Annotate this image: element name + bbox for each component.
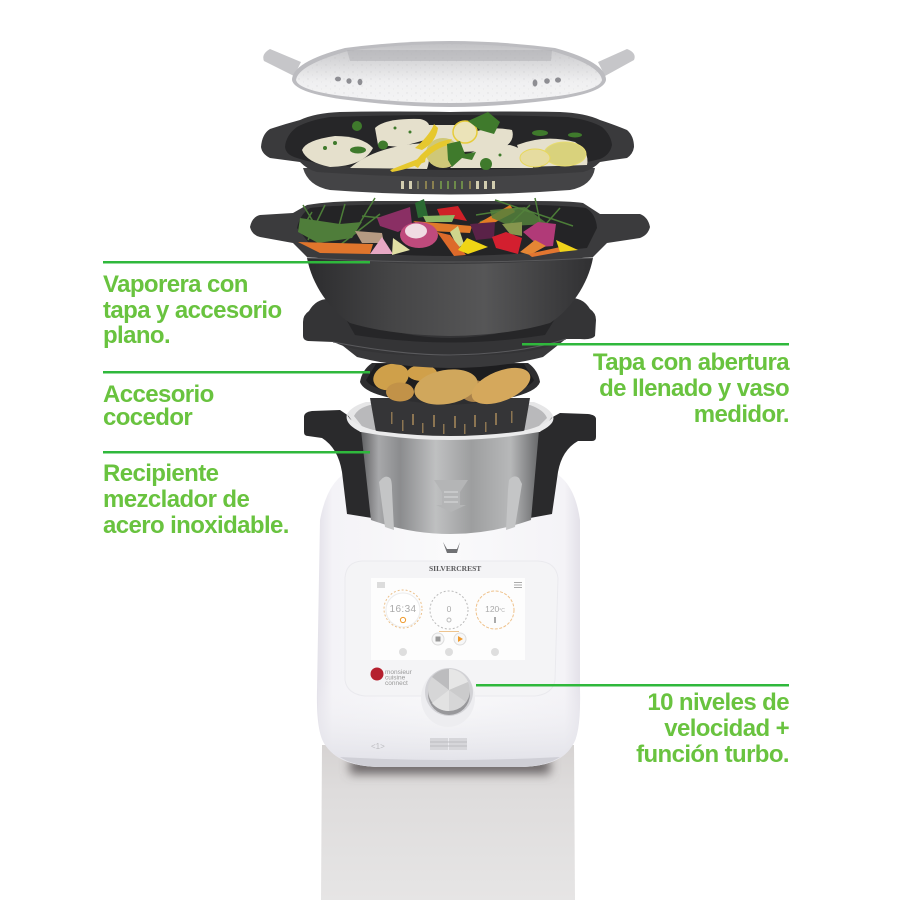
callout: lid: Tapa con abertura bbox=[593, 349, 790, 376]
callout: lid bbox=[522, 343, 790, 428]
temperature dial: 120°C bbox=[485, 604, 505, 614]
mixing bowl rear and handles bbox=[304, 402, 596, 518]
callout: steamer: plano. bbox=[103, 322, 170, 349]
tray slots bbox=[401, 181, 495, 189]
lid body bbox=[292, 41, 606, 107]
monsieur cuisine logo: cuisine bbox=[385, 674, 406, 682]
bowl logo bbox=[443, 542, 460, 553]
lid vent holes bbox=[335, 77, 561, 87]
lid handles bbox=[263, 49, 635, 76]
basket body bbox=[370, 398, 530, 438]
monsieur cuisine logo: monsieur bbox=[385, 669, 413, 676]
speed dial: 0 bbox=[447, 604, 452, 614]
callout: speed levels bbox=[476, 684, 790, 768]
lid flange and handles bbox=[303, 298, 596, 356]
herbs bbox=[323, 112, 582, 170]
callout: cooking accessory: Accesorio bbox=[103, 381, 214, 408]
brand name: SILVERCREST bbox=[429, 564, 481, 573]
lid lower disc bbox=[333, 338, 567, 368]
touch screen bbox=[371, 578, 525, 660]
callout: lid: de llenado y vaso bbox=[599, 375, 789, 402]
monsieur cuisine logo bbox=[370, 668, 413, 687]
callout: speed levels: velocidad + bbox=[664, 715, 790, 742]
callout: cooking accessory bbox=[103, 371, 370, 431]
monsieur cuisine logo: connect bbox=[385, 680, 408, 687]
callout: mixing bowl bbox=[103, 451, 370, 539]
control panel bbox=[345, 561, 558, 696]
callout: mixing bowl: acero inoxidable. bbox=[103, 512, 289, 539]
callout: speed levels: 10 niveles de bbox=[647, 689, 789, 716]
screen bottom icons bbox=[399, 648, 499, 656]
callout: steamer: tapa y accesorio bbox=[103, 297, 282, 324]
callout: steamer: Vaporera con bbox=[103, 271, 248, 298]
base vent bbox=[430, 738, 467, 750]
steel arrow icon bbox=[434, 480, 468, 512]
timer dial bbox=[384, 590, 422, 628]
steel body bbox=[361, 430, 539, 534]
sound mark: <1> bbox=[371, 742, 385, 751]
cooking basket with potatoes bbox=[360, 360, 540, 438]
callout: steamer bbox=[103, 261, 370, 349]
callout: speed levels: función turbo. bbox=[636, 741, 789, 768]
right black handle bbox=[530, 413, 596, 518]
steamer bowl with vegetables bbox=[250, 198, 650, 336]
callout: mixing bowl: mezclador de bbox=[103, 486, 249, 513]
callout: lid: medidor. bbox=[694, 401, 789, 428]
bowl body bbox=[307, 258, 593, 336]
steel rim back bbox=[347, 402, 553, 432]
left black handle bbox=[304, 410, 372, 518]
lemon slices bbox=[390, 121, 586, 172]
speed knob bbox=[421, 668, 475, 727]
vegetables bbox=[298, 198, 578, 257]
temperature dial bbox=[476, 591, 514, 629]
steel mixing bowl front bbox=[347, 414, 553, 534]
potatoes bbox=[370, 360, 535, 412]
bowl rim bbox=[250, 201, 650, 264]
glass lid bbox=[263, 41, 635, 107]
reflection below appliance bbox=[321, 745, 575, 900]
timer dial: 16:34 bbox=[389, 604, 417, 615]
steel embossed marks bbox=[379, 476, 522, 530]
fish fillets bbox=[302, 119, 588, 169]
basket rim bbox=[360, 363, 540, 405]
tray base bbox=[303, 168, 595, 194]
play and stop buttons bbox=[432, 631, 466, 645]
callout: mixing bowl: Recipiente bbox=[103, 460, 219, 487]
appliance base bbox=[317, 470, 580, 767]
steel front rim bbox=[347, 414, 553, 440]
filling lid with opening bbox=[303, 298, 596, 368]
flat steamer tray with fish bbox=[261, 112, 634, 194]
herb sprigs bbox=[300, 198, 573, 245]
basket slots bbox=[391, 411, 512, 434]
speed dial bbox=[430, 591, 468, 629]
callout: cooking accessory: cocedor bbox=[103, 404, 192, 431]
tray rim bbox=[261, 112, 634, 177]
